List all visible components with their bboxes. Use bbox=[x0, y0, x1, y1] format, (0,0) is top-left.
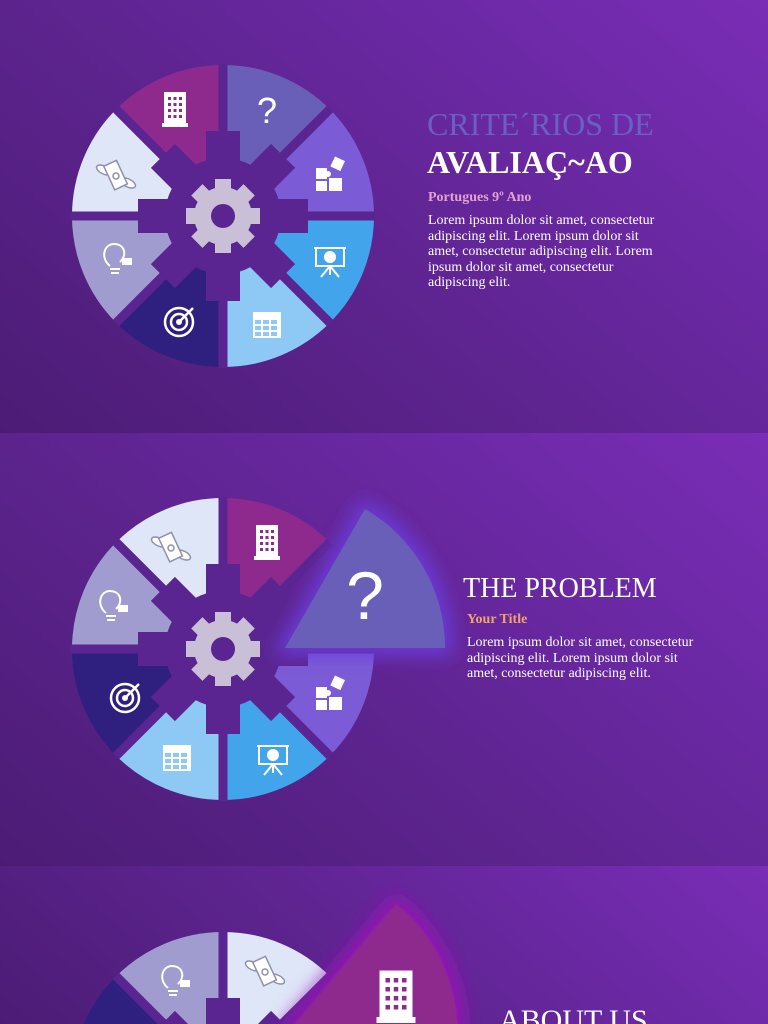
subtitle: Your Title bbox=[467, 612, 527, 627]
exploded sector: question: ? bbox=[346, 558, 384, 634]
wheel 2 bbox=[71, 496, 461, 801]
text block: Lorem ipsum dolor sit amet, consectetur adipiscing elit. Lorem ipsum dolor sit amet, consectetur adipiscing elit. Lorem ipsum dolor sit amet, consectetur adipiscing elit. bbox=[428, 213, 654, 290]
icon: gear bbox=[186, 179, 260, 253]
panel: the problem bbox=[0, 433, 768, 866]
title: THE PROBLEM bbox=[463, 573, 657, 604]
subtitle: Portugues 9º Ano bbox=[428, 190, 531, 205]
panel: criterios bbox=[0, 0, 768, 433]
wheel 1 bbox=[71, 65, 374, 368]
title: CRITE´RIOS DE bbox=[427, 106, 654, 142]
panel: about us bbox=[0, 866, 768, 1024]
text block: Lorem ipsum dolor sit amet, consectetur adipiscing elit. Lorem ipsum dolor sit amet, consectetur adipiscing elit. bbox=[467, 635, 693, 681]
wheel 1: ? bbox=[257, 90, 277, 131]
exploded sector: question bbox=[285, 509, 445, 648]
wheel 3 bbox=[84, 890, 473, 1024]
exploded sector: building bbox=[290, 904, 457, 1024]
panel: criterios: AVALIAÇ~AO bbox=[427, 144, 633, 180]
